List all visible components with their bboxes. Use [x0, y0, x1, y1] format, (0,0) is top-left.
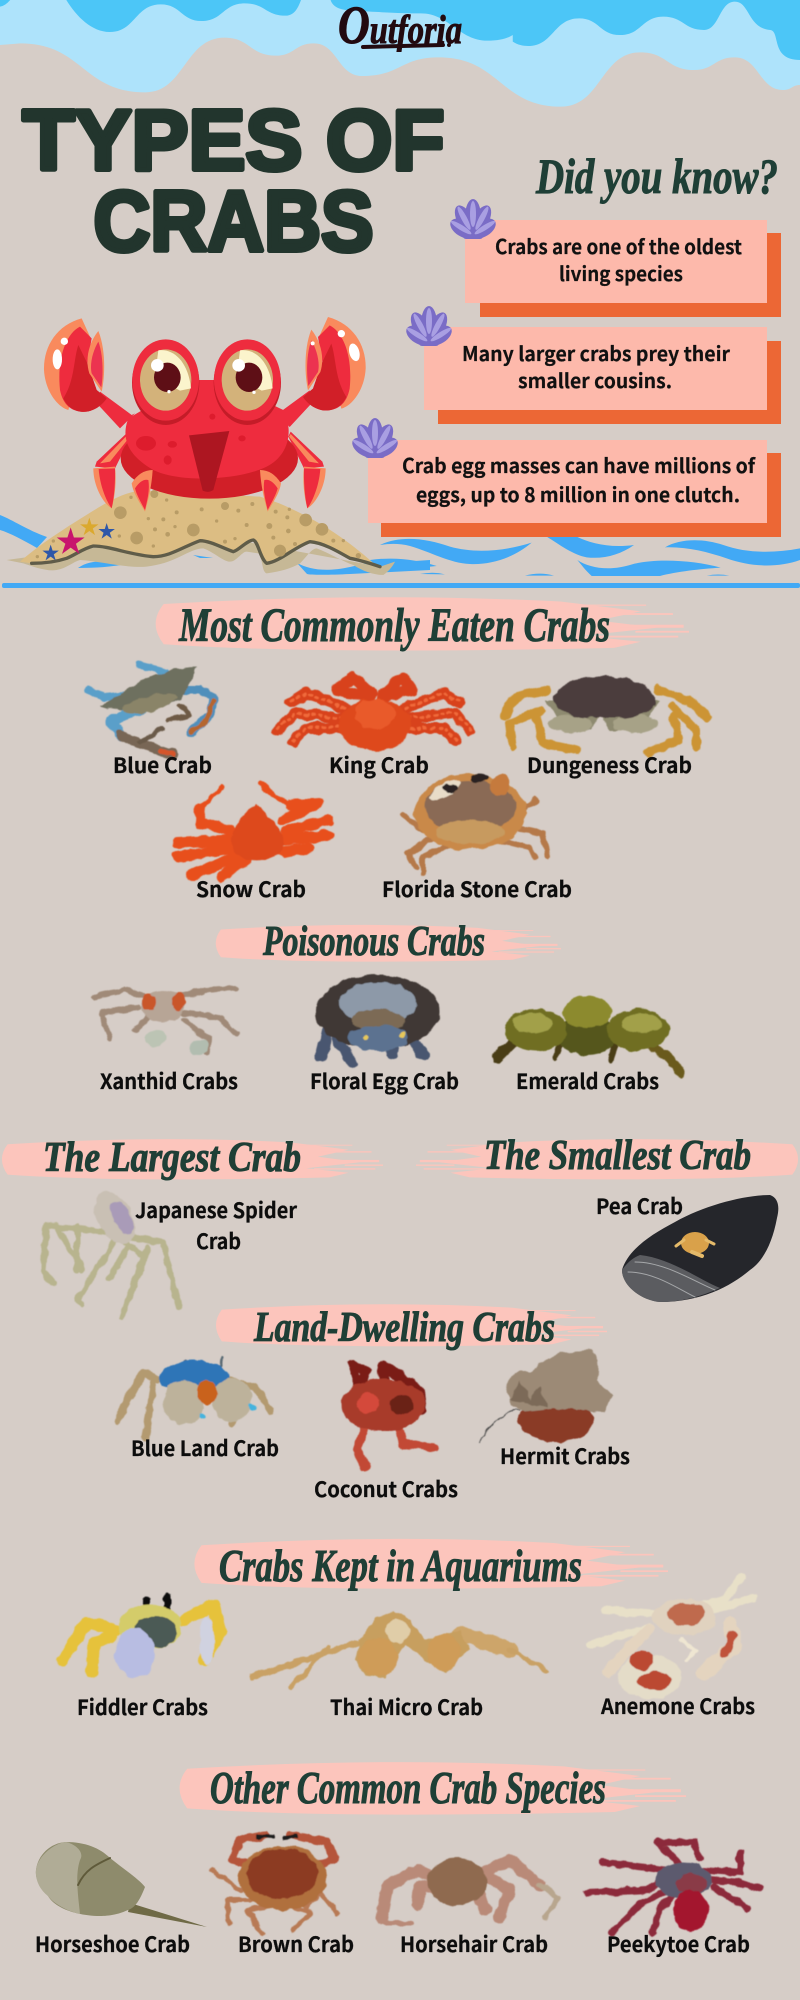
label: Peekytoe Crab	[607, 1929, 750, 1959]
label: Xanthid Crabs	[100, 1066, 238, 1096]
claws	[44, 317, 366, 428]
label: Dungeness Crab	[527, 750, 692, 780]
label: Crab	[196, 1226, 241, 1256]
crab: hermit crab	[480, 1350, 612, 1442]
label: Pea Crab	[596, 1191, 683, 1221]
crab: dungeness crab	[505, 676, 707, 752]
label: Blue Crab	[113, 750, 212, 780]
crab: floral egg crab	[316, 975, 440, 1063]
title: CRABS	[94, 174, 374, 270]
fact card 3: eggs, up to 8 million in one clutch.	[416, 479, 740, 508]
section heading: kept in aquariums: Crabs Kept in Aquariums	[219, 1540, 582, 1591]
crab: japanese spider crab	[43, 1185, 179, 1317]
crab: anemone crab	[590, 1577, 753, 1699]
section heading: most commonly eaten: Most Commonly Eaten Crabs	[178, 599, 610, 652]
label: Fiddler Crabs	[77, 1692, 208, 1722]
fact card 2	[424, 327, 781, 424]
fact card 1: Crabs are one of the oldest	[495, 231, 743, 260]
crab: florida stone crab	[403, 774, 548, 873]
fact card 1	[465, 220, 781, 317]
label: Blue Land Crab	[131, 1433, 279, 1463]
label: Anemone Crabs	[600, 1691, 755, 1721]
label: Snow Crab	[196, 874, 306, 904]
label: Floral Egg Crab	[310, 1066, 459, 1096]
label: Japanese Spider	[135, 1195, 298, 1225]
eyes	[132, 339, 281, 425]
crab: brown crab	[212, 1835, 337, 1933]
title	[22, 94, 444, 270]
icon: shell 3	[349, 418, 401, 462]
label	[135, 1195, 298, 1256]
crab: horseshoe crab	[36, 1842, 207, 1927]
label: Florida Stone Crab	[382, 874, 572, 904]
label: Thai Micro Crab	[330, 1692, 483, 1722]
icon: shell 2	[403, 306, 455, 350]
crab: thai micro crab	[252, 1610, 546, 1688]
title: TYPES OF	[22, 94, 444, 188]
front legs	[132, 470, 281, 512]
section heading: the largest crab: The Largest Crab	[43, 1135, 301, 1181]
section heading: the smallest crab: The Smallest Crab	[484, 1133, 751, 1179]
crab: coconut crab	[341, 1363, 434, 1467]
section heading: poisonous: Poisonous Crabs	[262, 919, 485, 965]
divider line	[2, 583, 800, 588]
crab: fiddler crab	[63, 1597, 220, 1678]
icon: shell 1	[447, 199, 499, 243]
crab: pea crab on a mussel	[622, 1195, 778, 1302]
mascot: cartoon crab on a sand island	[7, 317, 395, 575]
label: Coconut Crabs	[314, 1474, 458, 1504]
side legs	[93, 432, 326, 508]
crab: blue land crab	[117, 1358, 270, 1437]
crab: emerald crabs	[497, 996, 681, 1073]
label: Horseshoe Crab	[35, 1929, 190, 1959]
label: Brown Crab	[238, 1929, 354, 1959]
fact card 3	[368, 440, 781, 537]
sand island	[7, 490, 395, 575]
label: King Crab	[329, 750, 429, 780]
crab: blue crab	[88, 665, 214, 755]
crab: king crab	[276, 677, 472, 751]
top water waves	[0, 0, 800, 107]
section heading: other common species: Other Common Crab Species	[210, 1762, 606, 1813]
water waves near the island	[0, 515, 800, 576]
crab: peekytoe crab	[587, 1842, 760, 1932]
fact card 2: Many larger crabs prey their	[462, 338, 730, 367]
fact card 1: living species	[559, 258, 683, 287]
crab body	[121, 380, 298, 499]
label: Emerald Crabs	[516, 1066, 659, 1096]
section heading: land-dwelling: Land-Dwelling Crabs	[253, 1305, 555, 1351]
crab: horsehair crab	[382, 1858, 558, 1923]
fact card 2: smaller cousins.	[518, 365, 672, 394]
label: Hermit Crabs	[500, 1441, 630, 1471]
label: Horsehair Crab	[400, 1929, 548, 1959]
crab: snow crab	[178, 783, 328, 876]
fact card 3: Crab egg masses can have millions of	[402, 450, 757, 479]
crab: xanthid crabs	[94, 988, 237, 1055]
